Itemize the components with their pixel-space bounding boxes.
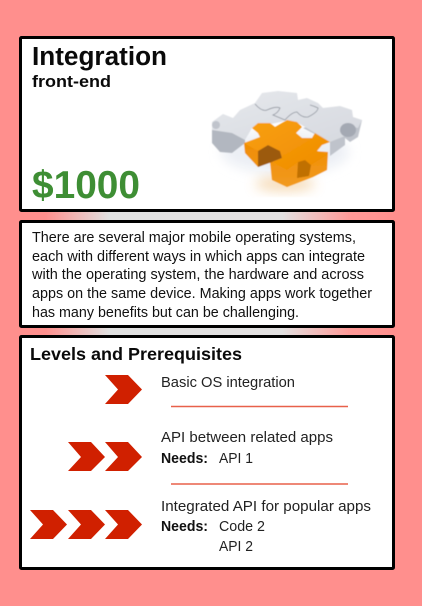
orange piece top — [244, 120, 330, 170]
description text: has many benefits but can be challenging. — [32, 304, 299, 321]
level 3 text — [161, 498, 371, 555]
level 2 text: API 1 — [219, 450, 253, 467]
panel: levels and prerequisites — [20, 336, 394, 568]
level 2 chevrons — [68, 442, 142, 471]
description text: There are several major mobile operating systems, — [32, 229, 356, 246]
level 3 text: Integrated API for popular apps — [161, 498, 371, 515]
description text — [31, 229, 372, 321]
level 2 text: API between related apps — [161, 429, 333, 446]
subtitle: front-end — [32, 72, 111, 91]
level 3 text: API 2 — [219, 538, 253, 555]
orange notches — [258, 145, 282, 167]
grey notches — [340, 123, 356, 137]
panel: integration header — [20, 38, 394, 210]
description text: each with different ways in which apps can integrate — [32, 248, 365, 265]
level 2 text — [161, 429, 333, 467]
level 3 text: Needs: — [161, 518, 208, 535]
level 1 chevrons — [105, 375, 142, 404]
title: Integration — [32, 43, 167, 71]
orange piece sides — [244, 140, 328, 187]
level 1 text: Basic OS integration — [161, 374, 295, 391]
heading: Levels and Prerequisites — [30, 344, 242, 364]
level 3 text: Code 2 — [219, 518, 265, 535]
description text: with the operating system, the hardware and across — [31, 266, 364, 283]
price: $1000 — [32, 164, 140, 207]
seams — [255, 104, 318, 120]
icon: puzzle pieces — [212, 91, 362, 191]
level 2 text: Needs: — [161, 450, 208, 467]
grey pieces top — [212, 91, 362, 142]
grey pieces sides — [212, 122, 245, 153]
panel: description — [20, 222, 394, 326]
description text: apps on the same device. Making apps work together — [32, 285, 372, 302]
level 3 chevrons — [30, 510, 142, 539]
